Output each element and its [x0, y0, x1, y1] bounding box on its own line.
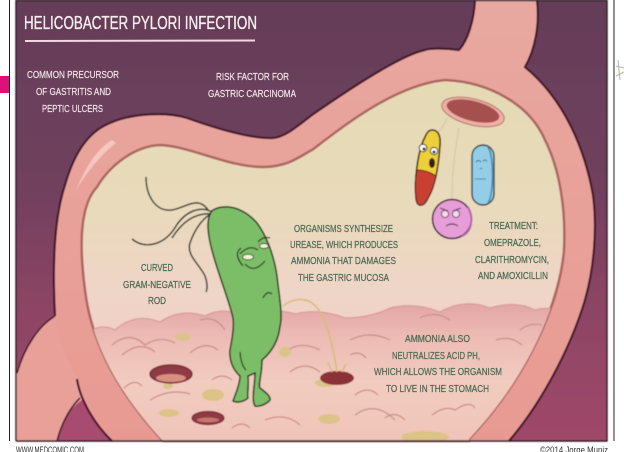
ulcer under stream [320, 371, 354, 385]
mucosa creases [112, 314, 542, 428]
stomach highlight [76, 140, 116, 190]
text: curved rod: ROD [148, 295, 166, 307]
bacterium [208, 207, 281, 406]
text: ammonia: NEUTRALIZES ACID PH, [392, 350, 480, 362]
title: HELICOBACTER PYLORI INFECTION [24, 13, 257, 33]
ulcer small [192, 412, 224, 424]
text: urease [290, 223, 398, 284]
lower left background [57, 398, 112, 441]
pill tethers [436, 118, 459, 198]
text: risk factor: RISK FACTOR FOR [216, 71, 289, 83]
stomach top opening [439, 92, 507, 132]
text: precursor: PEPTIC ULCERS [42, 103, 103, 115]
duodenum outlines [17, 316, 80, 441]
text: curved rod: GRAM-NEGATIVE [123, 279, 191, 291]
text: treatment: CLARITHROMYCIN, [475, 254, 549, 266]
text: urease: THE GASTRIC MUCOSA [298, 272, 389, 284]
text: ammonia: TO LIVE IN THE STOMACH [386, 383, 489, 395]
text: urease: ORGANISMS SYNTHESIZE [294, 223, 393, 235]
text: precursor [27, 69, 119, 115]
title underline [25, 40, 255, 42]
text: treatment [475, 220, 549, 282]
pink tab [0, 76, 9, 93]
bacterium face [237, 238, 272, 370]
duodenum [16, 314, 90, 441]
mucosa folds [85, 304, 575, 445]
text: treatment: AND AMOXICILLIN [478, 270, 548, 282]
stomach lumen [82, 80, 564, 441]
pink pill [432, 200, 472, 238]
text: ammonia: WHICH ALLOWS THE ORGANISM [374, 366, 502, 378]
text: ammonia: AMMONIA ALSO [405, 333, 470, 345]
text: treatment: TREATMENT: [489, 220, 538, 232]
blue pill [472, 145, 494, 205]
bacterium eyes [242, 244, 268, 260]
text: urease: AMMONIA THAT DAMAGES [291, 255, 396, 267]
text: curved rod [123, 262, 191, 307]
text: treatment: OMEPRAZOLE, [484, 237, 541, 249]
yellow patches [159, 333, 449, 443]
text: curved rod: CURVED [141, 262, 173, 274]
text: ammonia [374, 333, 502, 395]
text: precursor: COMMON PRECURSOR [27, 69, 119, 81]
text: precursor: OF GASTRITIS AND [36, 86, 111, 98]
text: risk factor [208, 71, 296, 100]
mucosa surface [85, 304, 575, 445]
urine stream [283, 299, 346, 372]
flagella [132, 177, 214, 292]
ulcer large [150, 365, 192, 383]
yellow and red pill [415, 130, 440, 205]
side scribble [616, 60, 624, 80]
text: risk factor: GASTRIC CARCINOMA [208, 88, 296, 100]
text: urease: UREASE, WHICH PRODUCES [290, 239, 398, 251]
